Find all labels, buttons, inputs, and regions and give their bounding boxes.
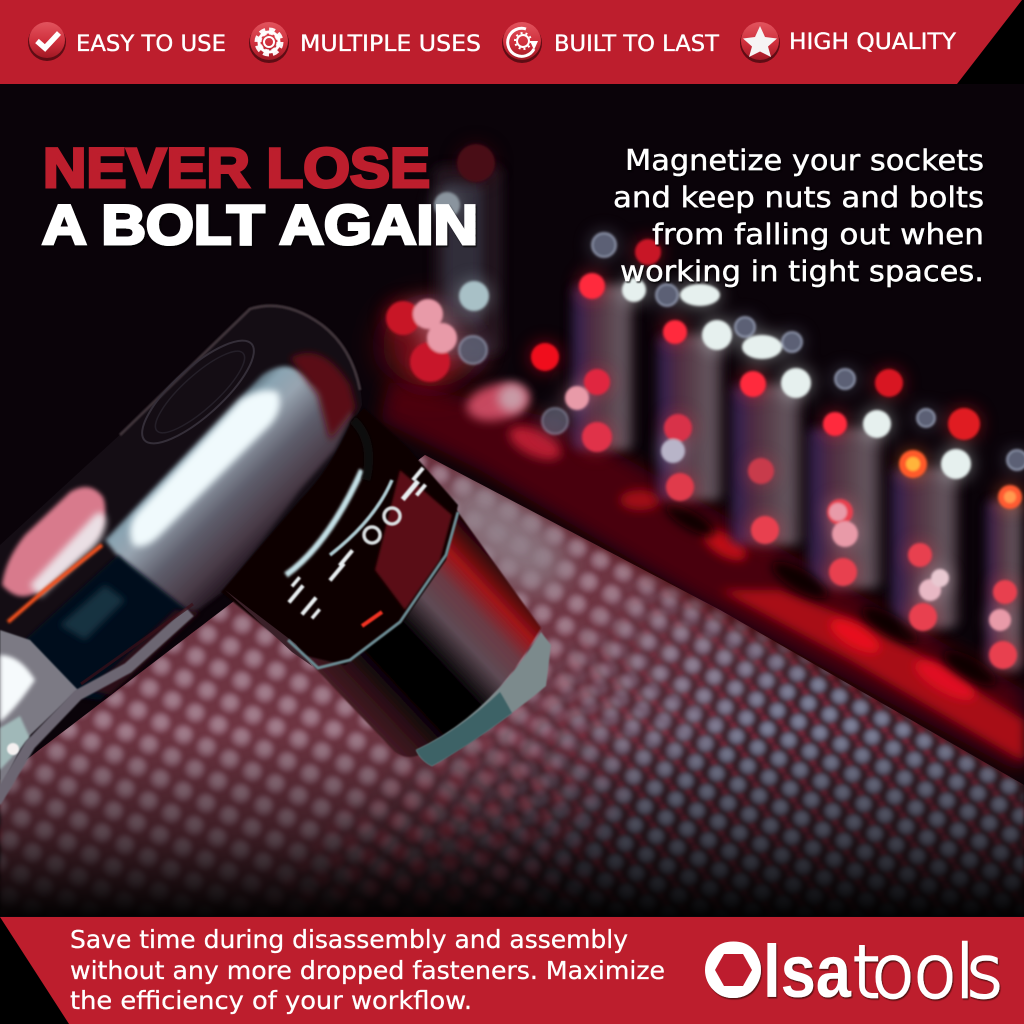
bottom text: without any more dropped fasteners. Maximize xyxy=(70,956,665,985)
pink reflection xyxy=(2,487,105,596)
description text: and keep nuts and bolts xyxy=(613,181,984,214)
red glow along socket rail xyxy=(380,303,1024,775)
icon: gear xyxy=(249,22,289,63)
bottom text: the efficiency of your workflow. xyxy=(70,986,472,1015)
socket engraving marks xyxy=(287,467,427,620)
label: built to last: BUILT TO LAST xyxy=(554,31,719,57)
label: easy to use: EASY TO USE xyxy=(76,31,226,57)
socket body xyxy=(298,508,541,757)
logo xyxy=(704,925,1004,1014)
red reflection on head xyxy=(290,353,356,440)
dark neck band xyxy=(25,555,190,700)
silver lower edge xyxy=(0,612,190,802)
blurred sockets row xyxy=(433,165,1024,670)
bokeh light spots xyxy=(386,144,1024,669)
icon: star xyxy=(740,22,780,63)
top banner xyxy=(0,0,1022,84)
description text xyxy=(613,144,984,288)
logo: lsa xyxy=(763,930,852,1013)
label: high quality: HIGH QUALITY xyxy=(789,29,956,55)
label: multiple uses: MULTIPLE USES xyxy=(300,31,481,57)
highlight stripe xyxy=(130,390,280,546)
head dark cap xyxy=(0,306,362,745)
bottom text: Save time during disassembly and assembly xyxy=(70,925,628,954)
heading line: never lose: NEVER LOSE xyxy=(43,136,430,199)
collar xyxy=(221,408,458,665)
rubber mat with dot texture xyxy=(0,440,1024,920)
bottom banner xyxy=(0,917,1024,1024)
hex tip xyxy=(416,632,551,766)
dark rack shadows xyxy=(661,498,1001,693)
chrome barrel xyxy=(105,366,352,615)
description text: working in tight spaces. xyxy=(620,255,984,288)
description text: from falling out when xyxy=(652,218,984,251)
icon: durability cycle xyxy=(502,22,542,63)
handle neck xyxy=(0,630,78,790)
icon: check mark xyxy=(28,22,66,61)
bottom text xyxy=(70,925,665,1015)
heading line: a bolt again: A BOLT AGAIN xyxy=(42,193,478,256)
ratchet handle xyxy=(0,306,362,802)
socket xyxy=(221,408,551,766)
logo: tools xyxy=(852,930,1004,1014)
logo: O xyxy=(704,925,763,1014)
description text: Magnetize your sockets xyxy=(625,144,984,177)
heading xyxy=(42,136,478,256)
bokeh glow xyxy=(386,144,1024,669)
